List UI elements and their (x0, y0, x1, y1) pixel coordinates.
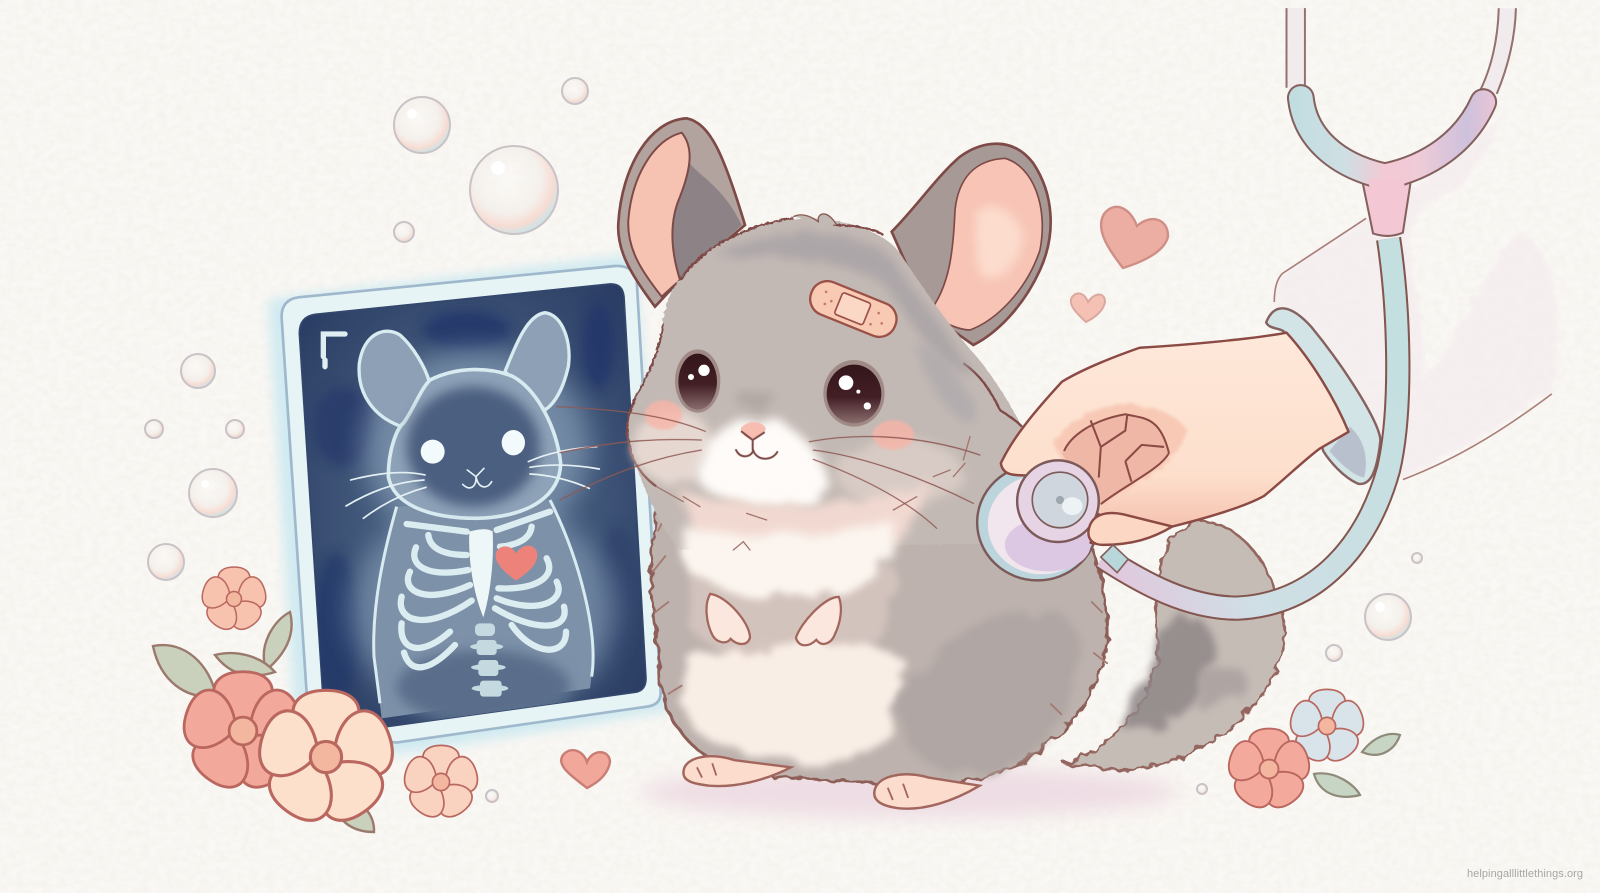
silhouette halo (363, 350, 590, 543)
x-ray face and whiskers (346, 447, 599, 518)
heart: floor (561, 750, 610, 788)
bud flower (199, 567, 269, 634)
left ear (618, 118, 745, 307)
heart: small (1071, 293, 1105, 322)
x-ray heart (496, 546, 537, 581)
ground shadow (640, 766, 1180, 818)
body (651, 408, 1108, 809)
mouth (736, 432, 777, 459)
soap bubbles (145, 78, 1422, 802)
head top wash (717, 232, 973, 377)
stethoscope diaphragm (1017, 460, 1099, 542)
tail (1063, 520, 1286, 770)
curled fingers (1062, 414, 1169, 510)
watermark: helpingalllittlethings.org (1467, 868, 1583, 880)
cheek washes (633, 410, 713, 483)
ear tubes (1296, 8, 1508, 92)
whiskers (557, 407, 980, 528)
x-ray spine (470, 623, 508, 697)
nose bridge fuzz (735, 391, 778, 409)
doctor arm and stethoscope (977, 8, 1558, 608)
feet (683, 756, 791, 786)
large peach flower (252, 690, 400, 830)
tube connector (1101, 545, 1128, 573)
mid body wash (689, 547, 898, 667)
head outline (627, 218, 1022, 487)
head fur (628, 218, 1022, 550)
stethoscope stem (1362, 180, 1411, 236)
stethoscope tube (1103, 239, 1398, 608)
muzzle wash (697, 418, 827, 509)
body fur strokes (653, 510, 1107, 714)
cuff (1266, 308, 1380, 484)
leaves (1314, 734, 1400, 797)
top tuft (793, 214, 837, 225)
palm shadow (1054, 404, 1187, 510)
pink flower (1224, 729, 1314, 813)
x-ray ribcage (401, 512, 566, 667)
lab coat (1274, 94, 1558, 480)
chest white patch (681, 514, 882, 597)
nose (741, 422, 766, 440)
small flower (401, 745, 481, 822)
x-ray dark sheet (299, 284, 646, 727)
collar pink band (694, 480, 903, 528)
collar band (677, 483, 933, 547)
x-ray body (374, 500, 592, 718)
x-ray right ear (505, 313, 569, 410)
side gray wash (898, 610, 1080, 774)
x-ray left ear (359, 331, 429, 427)
blush (645, 400, 914, 450)
heart: large (1101, 207, 1168, 268)
film mottling (313, 303, 637, 717)
x-ray frame (282, 266, 661, 742)
hand (1001, 333, 1349, 544)
corner marker (323, 334, 345, 367)
lower belly cream (684, 643, 901, 762)
blue flower (1287, 689, 1367, 766)
neck fur strokes (657, 437, 970, 550)
front paws (707, 594, 750, 644)
leaves (153, 612, 374, 832)
eyes (675, 349, 885, 427)
x-ray film (277, 263, 665, 747)
stethoscope yoke (1301, 98, 1483, 176)
chinchilla (557, 118, 1286, 809)
x-ray head (388, 370, 561, 518)
x-ray glow (277, 263, 665, 747)
bandage (805, 276, 902, 342)
x-ray eyes (421, 430, 525, 464)
pink flower (178, 672, 308, 796)
head (557, 118, 1051, 560)
left flower cluster (153, 567, 481, 832)
right ear (892, 144, 1051, 345)
x-ray sternum (469, 529, 493, 617)
x-ray chinchilla silhouette (359, 313, 593, 723)
stethoscope chest piece (977, 464, 1098, 580)
thumb (1088, 513, 1172, 545)
right flower cluster (1224, 689, 1400, 813)
